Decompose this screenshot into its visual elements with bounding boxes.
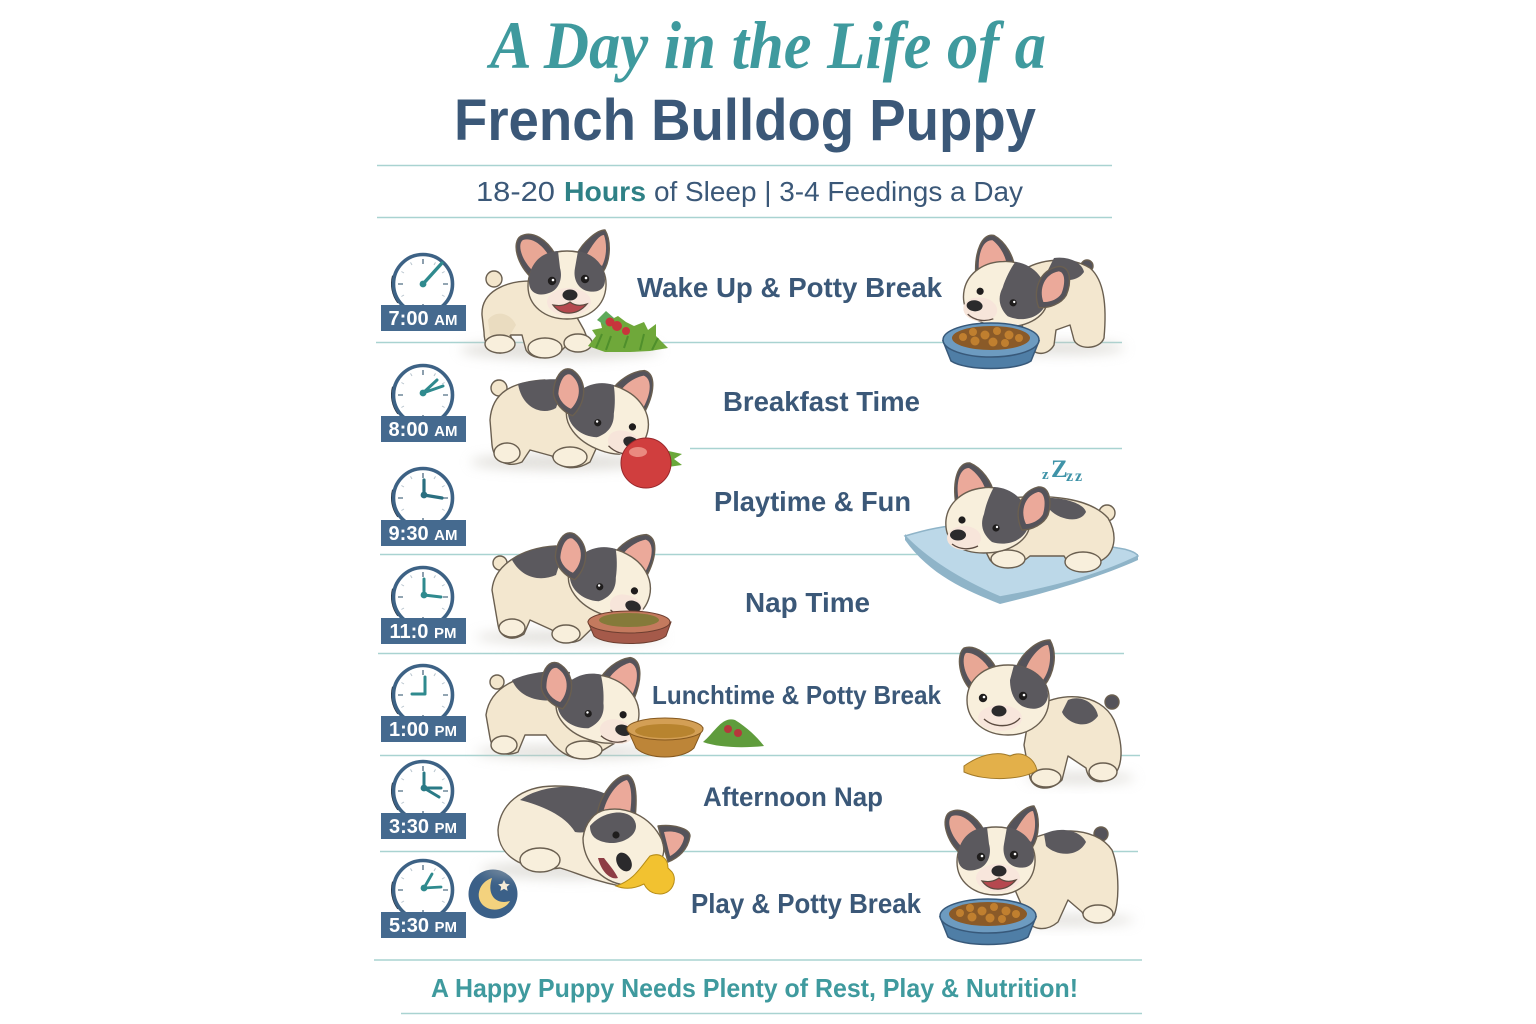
time badge: 5:30 PM: 5:30 PM — [389, 915, 457, 937]
red ball — [621, 438, 682, 488]
label: nap: Nap Time — [745, 587, 870, 618]
snack — [964, 754, 1037, 779]
bowl — [588, 611, 671, 644]
time badge: 3:30 PM — [381, 760, 466, 839]
time badge: 7:00 AM — [381, 254, 466, 331]
schedule labels — [637, 272, 942, 919]
time badge: 8:00 AM: 8:00 AM — [389, 419, 457, 441]
icon: moon — [468, 870, 518, 918]
time badge: 9:30 AM: 9:30 AM — [389, 523, 457, 545]
zzz: z — [1066, 468, 1073, 485]
label: play and potty: Play & Potty Break — [691, 888, 921, 919]
puppy: afternoon nap with yellow toy — [480, 775, 690, 894]
title line 2: French Bulldog Puppy — [454, 88, 1036, 153]
puppy: lunchtime with wooden bowl — [475, 637, 764, 759]
plant — [588, 311, 668, 352]
footer tagline: A Happy Puppy Needs Plenty of Rest, Play & Nutrition! — [431, 973, 1078, 1003]
title line 1: A Day in the Life of a — [486, 7, 1046, 83]
puppy: eating from brown bowl — [475, 507, 671, 644]
label: wake up: Wake Up & Potty Break — [637, 272, 942, 303]
zzz: Z — [1051, 456, 1068, 483]
toy — [616, 855, 674, 894]
title — [454, 7, 1046, 153]
time badge: 1:00 PM: 1:00 PM — [389, 719, 457, 741]
time badge: 1:00 PM — [381, 664, 466, 742]
label: playtime: Playtime & Fun — [714, 486, 911, 517]
subtitle: of Sleep | 3-4 Feedings a Day — [654, 176, 1023, 207]
time badge: 7:00 AM: 7:00 AM — [389, 308, 457, 330]
subtitle: 18-20 — [476, 176, 555, 207]
wooden bowl and leaves — [627, 718, 764, 757]
puppy: eating from blue bowl (top right) — [943, 233, 1125, 368]
zzz: z — [1042, 467, 1049, 483]
puppy: waking up with plant — [460, 230, 668, 359]
cushion — [905, 534, 1138, 604]
subtitle — [476, 176, 1023, 207]
puppy: sleeping on cushion — [905, 456, 1138, 604]
time badge: 11:00 PM — [381, 566, 466, 644]
time badge: 11:00 PM: 11:0 PM — [390, 621, 456, 643]
label: lunchtime: Lunchtime & Potty Break — [652, 680, 942, 710]
subtitle: Hours — [564, 176, 646, 207]
label: afternoon nap: Afternoon Nap — [703, 782, 883, 812]
zzz — [1042, 456, 1082, 485]
zzz: z — [1075, 468, 1082, 485]
puppy: sitting with cheese snack — [959, 640, 1135, 788]
time badge: 8:00 AM — [381, 364, 466, 442]
time badge: 9:30 AM — [381, 468, 466, 546]
time badge: 3:30 PM: 3:30 PM — [389, 816, 457, 838]
label: breakfast: Breakfast Time — [723, 386, 920, 417]
time badge: 5:30 PM — [381, 860, 466, 938]
puppy: eating from blue bowl (bottom right) — [940, 806, 1135, 944]
puppy: playing with red ball — [470, 343, 682, 488]
